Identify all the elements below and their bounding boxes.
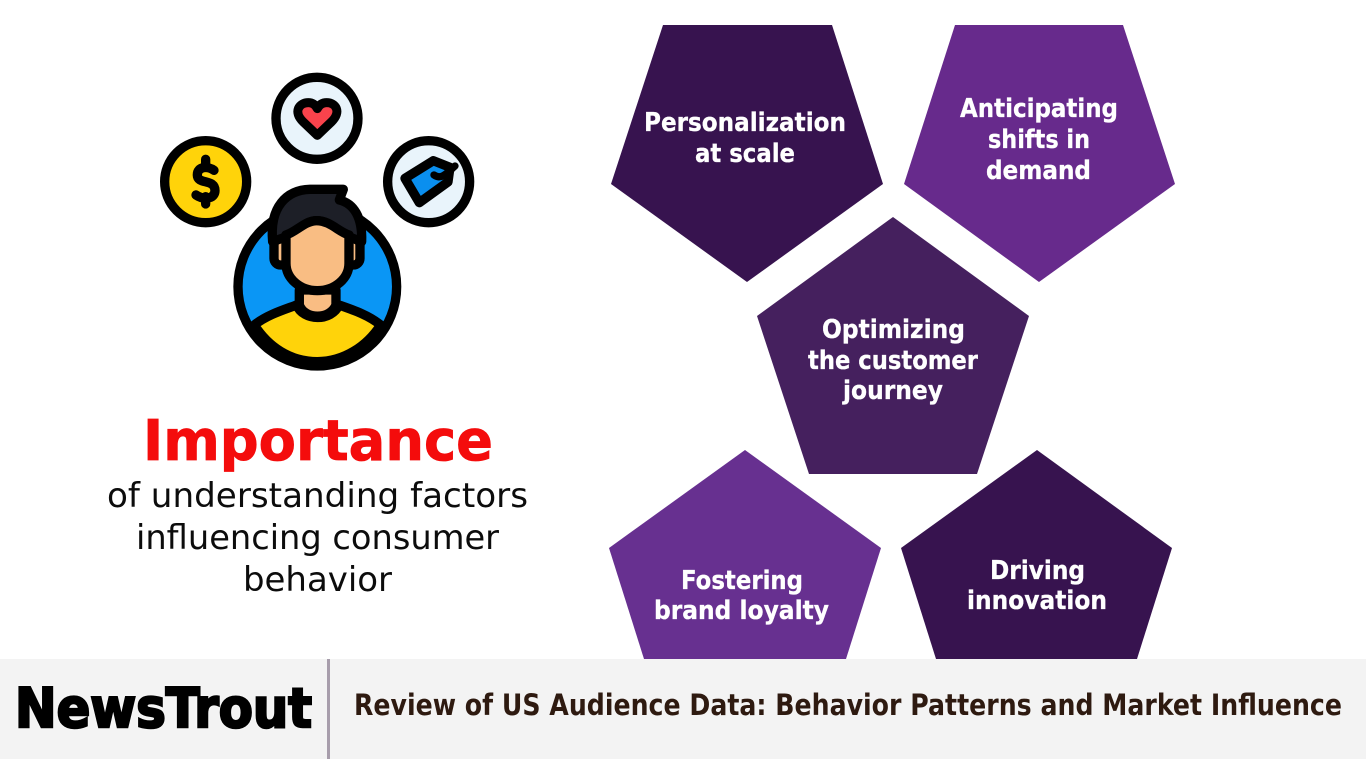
panel: fostering brand loyalty: brand loyalty: [654, 596, 829, 626]
subheading text block: behavior: [243, 560, 392, 600]
icon: heart bubble: [276, 77, 358, 159]
panel: personalization at scale: [611, 25, 883, 282]
panel: anticipating shifts in demand: demand: [986, 156, 1091, 186]
heading: Importance: Importance: [143, 409, 493, 474]
icon: dollar coin: [165, 141, 247, 223]
panel: fostering brand loyalty: [609, 450, 881, 659]
panel: driving innovation: [901, 450, 1172, 659]
panel: anticipating shifts in demand: Anticipating: [960, 94, 1118, 124]
panel: optimizing the customer journey: the customer: [808, 346, 978, 376]
subheading text block: influencing consumer: [136, 518, 499, 558]
panel: anticipating shifts in demand: shifts in: [988, 125, 1090, 155]
logo: NewsTrout: NewsTrout: [15, 677, 312, 740]
panel: fostering brand loyalty: Fostering: [681, 566, 803, 596]
panel: optimizing the customer journey: journey: [842, 376, 943, 406]
icon: person: [238, 189, 397, 366]
panel: anticipating shifts in demand: [904, 25, 1175, 282]
footer bar: [0, 659, 1366, 759]
panel: driving innovation: innovation: [967, 586, 1107, 616]
panel: optimizing the customer journey: [757, 217, 1029, 474]
subheading text block: of understanding factors: [107, 476, 528, 516]
panel: personalization at scale: at scale: [695, 139, 795, 169]
panel: optimizing the customer journey: Optimizing: [822, 315, 965, 345]
icon: price tag: [388, 141, 470, 223]
icon: consumer with money, heart and tag: [165, 77, 470, 366]
panel: driving innovation: Driving: [990, 556, 1085, 586]
subheading text block: [107, 476, 528, 600]
panel: personalization at scale: Personalization: [644, 108, 846, 138]
